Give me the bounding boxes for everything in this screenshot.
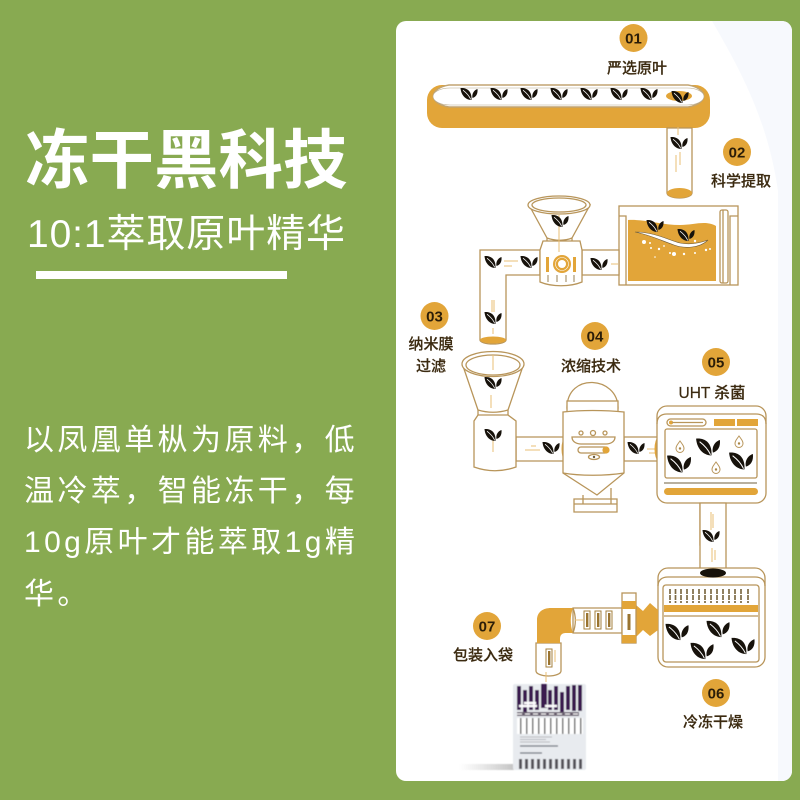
- pipe from conveyor: [667, 127, 692, 198]
- UHT sterilizer: [657, 406, 766, 545]
- step 03: badge and label: 03: [426, 308, 443, 326]
- step 06: badge and label: 冷冻干燥: [683, 713, 743, 731]
- step 06: badge and label: 06: [708, 686, 724, 702]
- step 01: badge and label: 严选原叶: [607, 60, 667, 77]
- step 03: badge and label: [408, 302, 454, 375]
- concentrator machine: [563, 382, 662, 512]
- step 02: badge and label: [711, 138, 771, 190]
- step 07: badge and label: [453, 612, 513, 664]
- freeze dryer: [658, 568, 765, 667]
- title underline: [36, 271, 287, 279]
- step 04: badge and label: [561, 322, 621, 375]
- step 04: badge and label: 浓缩技术: [561, 358, 621, 375]
- conveyor belt: [427, 85, 710, 128]
- step 01: badge and label: [607, 24, 667, 77]
- pale background shape: [782, 21, 792, 781]
- step 07: badge and label: 07: [479, 618, 495, 636]
- grinder funnel: [480, 196, 619, 344]
- title: 冻干黑科技: [25, 125, 348, 197]
- body text: 华。: [24, 578, 91, 611]
- pipe to freeze dryer: [700, 503, 726, 572]
- step 06: badge and label: [683, 679, 743, 731]
- white process panel: [396, 21, 792, 781]
- packing pipe and bellows: [536, 593, 658, 682]
- step 02: badge and label: 科学提取: [711, 172, 771, 190]
- step 07: badge and label: 包装入袋: [453, 646, 513, 664]
- step 04: badge and label: 04: [587, 328, 604, 346]
- product box of sachets: [460, 684, 586, 770]
- step 02: badge and label: 02: [729, 144, 745, 162]
- subtitle: 10:1萃取原叶精华: [27, 213, 346, 256]
- step 05: badge and label: 05: [708, 354, 724, 372]
- body text: 以凤凰单枞为原料，低: [24, 424, 358, 456]
- body text: 温冷萃，智能冻干，每: [24, 475, 358, 508]
- step 01: badge and label: 01: [625, 30, 642, 48]
- body text: [24, 424, 358, 611]
- step 05: badge and label: UHT 杀菌: [679, 384, 745, 402]
- step 05: badge and label: [679, 348, 745, 402]
- step 03: badge and label: 纳米膜: [408, 335, 454, 353]
- extraction tank: [619, 206, 738, 285]
- nano filter funnel: [462, 352, 568, 471]
- body text: 10g原叶才能萃取1g精: [24, 526, 358, 559]
- step 03: badge and label: 过滤: [416, 358, 446, 375]
